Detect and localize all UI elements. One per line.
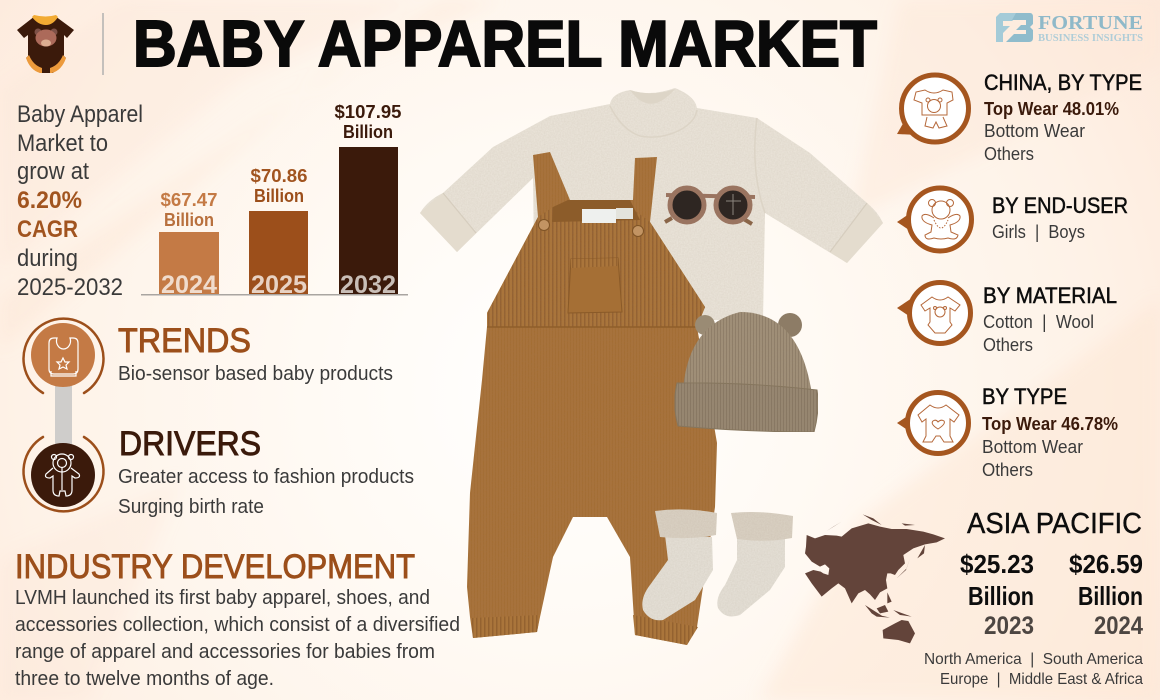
text block: market growth: 2025-2032 — [17, 274, 123, 301]
illustration: baby outfit — [420, 88, 883, 645]
text: type: Top Wear 46.78% — [982, 414, 1118, 434]
text: industry development body: accessories collection, which consist of a diversified — [15, 614, 460, 636]
bar chart — [141, 102, 408, 299]
sweater — [420, 88, 883, 320]
icon: baby onesie with bear — [17, 15, 74, 73]
text: type: Others — [982, 460, 1033, 480]
text: industry development body — [15, 587, 460, 690]
text: asia pacific: North America | South America — [924, 651, 1143, 668]
text: china by type — [984, 70, 1142, 164]
text: end-user: BY END-USER — [992, 193, 1128, 218]
hat — [675, 312, 818, 432]
text: material: Cotton | Wool — [983, 312, 1094, 332]
bar: 2025: 2025 — [251, 271, 307, 299]
bar: 2024: Billion — [164, 210, 214, 230]
bar: 2025 — [249, 166, 308, 299]
icon: china by type badge — [897, 75, 968, 142]
icon: bib badge — [24, 319, 103, 393]
bar: 2024 — [159, 190, 219, 299]
bar: 2032: Billion — [343, 122, 393, 142]
icon: material badge — [897, 282, 970, 344]
text: type: Bottom Wear — [982, 437, 1083, 457]
text block: market growth: CAGR — [17, 216, 78, 243]
text: material: Others — [983, 335, 1033, 355]
text: type — [982, 384, 1118, 480]
text: end-user: Girls | Boys — [992, 222, 1085, 242]
text: industry development body: range of apparel and accessories for babies from — [15, 641, 435, 663]
heading: industry development: INDUSTRY DEVELOPMENT — [15, 548, 415, 586]
text: industry development body: LVMH launched its first baby apparel, shoes, and — [15, 587, 430, 609]
text: china by type: CHINA, BY TYPE — [984, 70, 1142, 95]
title: BABY APPAREL MARKET — [133, 7, 877, 80]
logo: Fortune Business Insights — [996, 12, 1143, 44]
text: trends detail: Bio-sensor based baby products — [118, 363, 393, 385]
connector: trends to drivers — [55, 385, 72, 445]
text: drivers detail: Greater access to fashion products — [118, 466, 414, 488]
text block: market growth: grow at — [17, 158, 89, 185]
icon: romper badge — [24, 437, 103, 511]
heading: drivers: DRIVERS — [119, 425, 261, 463]
text: asia pacific: ASIA PACIFIC — [967, 508, 1142, 540]
bar: 2032 — [334, 102, 402, 299]
sunglasses — [665, 188, 755, 224]
logo: Fortune Business Insights: FORTUNE — [1038, 12, 1143, 34]
bar: 2032: 2032 — [340, 271, 396, 299]
text block: market growth: Market to — [17, 130, 108, 157]
text: asia pacific: Billion — [968, 581, 1034, 611]
text: asia pacific: 2023 — [984, 612, 1034, 640]
bar: 2032: $107.95 — [334, 102, 402, 122]
text: material — [983, 283, 1117, 355]
text: material: BY MATERIAL — [983, 283, 1117, 308]
text: asia pacific: Billion — [1078, 581, 1143, 611]
text block: market growth: Baby Apparel — [17, 101, 143, 128]
logo: Fortune Business Insights: BUSINESS INSIGHTS — [1038, 32, 1143, 44]
text block: market growth — [17, 101, 143, 301]
socks — [642, 509, 793, 620]
bar: 2025: $70.86 — [250, 166, 308, 186]
text: drivers detail: Surging birth rate — [118, 496, 264, 518]
bar: 2025: Billion — [254, 186, 304, 206]
heading: trends: TRENDS — [118, 322, 251, 360]
text: asia pacific — [924, 508, 1143, 688]
text block: market growth: 6.20% — [17, 187, 82, 214]
text: asia pacific: $26.59 — [1069, 549, 1143, 579]
text: asia pacific: Europe | Middle East & Africa — [940, 671, 1143, 688]
text: industry development body: three to twelve months of age. — [15, 668, 274, 690]
map: asia pacific — [805, 514, 945, 643]
bar: 2024: 2024 — [161, 271, 217, 299]
divider — [102, 13, 104, 75]
overalls — [467, 152, 717, 645]
text block: market growth: during — [17, 245, 78, 272]
icon: end-user badge — [897, 188, 972, 251]
icon: type badge — [897, 392, 968, 454]
text: china by type: Others — [984, 144, 1034, 164]
text: china by type: Bottom Wear — [984, 121, 1085, 141]
text: asia pacific: $25.23 — [960, 549, 1034, 579]
text: china by type: Top Wear 48.01% — [984, 99, 1119, 119]
bar: 2024: $67.47 — [160, 190, 218, 210]
text: end-user — [992, 193, 1128, 242]
text: drivers detail — [118, 466, 414, 518]
text: asia pacific: 2024 — [1094, 612, 1143, 640]
text: type: BY TYPE — [982, 384, 1067, 409]
